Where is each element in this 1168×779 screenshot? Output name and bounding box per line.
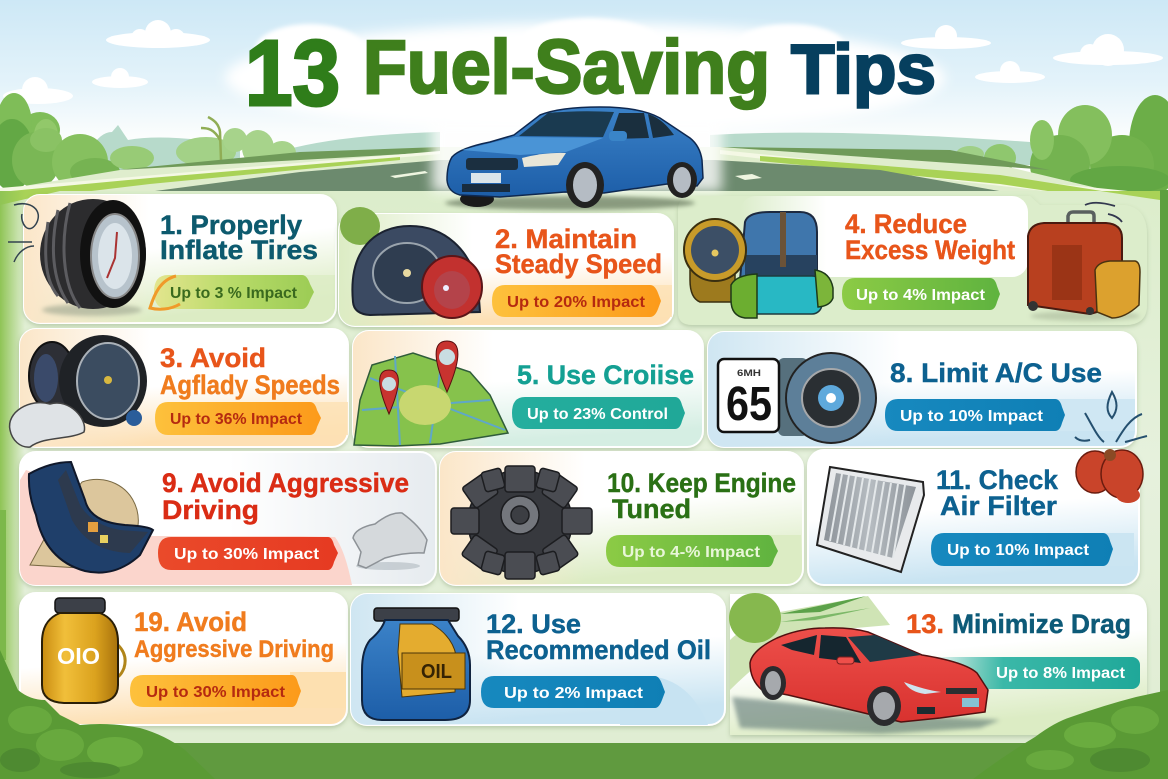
icon: oil jug (362, 608, 470, 720)
heading (486, 609, 711, 665)
impact pill: Up to 8% Impact (996, 665, 1126, 682)
background: sky (0, 0, 1168, 170)
icon: speedometer (352, 226, 482, 318)
heading: 10. Keep Engine (607, 468, 796, 498)
distant hills (90, 125, 1040, 170)
icon: speed sign and A/C: 65 (726, 378, 772, 431)
impact pill (150, 275, 335, 309)
icon: wheels and cloth (10, 335, 147, 447)
heading: Agflady Speeds (160, 370, 340, 400)
impact pill (930, 657, 1140, 689)
heading: 9. Avoid Aggressive (162, 468, 409, 498)
icon: swirl (8, 204, 38, 262)
heading: Tuned (612, 494, 691, 524)
heading (936, 465, 1059, 521)
panel: 13 drag (729, 593, 1147, 735)
impact pill (606, 535, 801, 567)
panel: 5 cruise (353, 331, 703, 447)
heading: 2. Maintain (495, 224, 637, 254)
heading: Driving (162, 495, 259, 525)
icon: red apple (1076, 449, 1143, 503)
icon: air swirls (1075, 392, 1147, 442)
heading: 12. Use (486, 609, 581, 639)
impact pill (842, 278, 1000, 310)
title: Fuel-Saving (363, 25, 770, 110)
icon: white glove (353, 513, 427, 570)
heading: Recommended Oil (486, 635, 711, 665)
right strip (1160, 190, 1168, 779)
impact pill (492, 285, 672, 317)
impact pill: Up to 30% Impact (146, 684, 286, 701)
icon: red car (750, 628, 988, 726)
icon: blue car (445, 107, 703, 210)
clouds (3, 18, 1163, 133)
heading: 19. Avoid (134, 607, 247, 637)
icon: bush (340, 207, 380, 245)
impact pill: Up to 10% Impact (947, 542, 1090, 559)
title (245, 21, 936, 125)
icon: map with pins (354, 341, 508, 446)
heading: 13. (906, 609, 944, 639)
impact pill: Up to 30% Impact (174, 546, 320, 563)
blue car glow (432, 120, 722, 192)
impact pill: Up to 20% Impact (507, 294, 646, 311)
icon: engine (451, 466, 592, 579)
heading (845, 209, 1015, 265)
heading: 1. Properly (160, 210, 302, 240)
lower panel background (0, 191, 1160, 743)
icon: tree and wind (729, 593, 890, 690)
icon: red suitcase (1028, 203, 1140, 321)
panel: 11 air filter (808, 449, 1143, 585)
panel: 8 A/C (708, 332, 1147, 447)
impact pill (158, 537, 338, 570)
icon: tire with gauge (40, 199, 146, 316)
impact pill: Up to 4% Impact (856, 287, 986, 304)
title: 13 (245, 21, 340, 125)
panel: 1 tires (8, 195, 336, 323)
panel: 19 aggressive driving (20, 593, 347, 725)
impact pill: Up to 36% Impact (170, 411, 303, 428)
road (0, 147, 1168, 205)
impact pill: Up to 3 % Impact (170, 285, 298, 302)
impact pill: Up to 2% Impact (504, 685, 644, 702)
panel: 4 reduce weight (678, 196, 1147, 325)
icon: oil jug: OIL (421, 661, 452, 683)
heading: Minimize Drag (952, 609, 1131, 639)
icon: seat and bag (29, 462, 153, 573)
icon: speed sign and A/C: 6MH (737, 368, 761, 379)
icon: bags with clock (684, 212, 833, 318)
heading (160, 210, 318, 265)
heading (134, 607, 334, 663)
panel top edge slope (0, 191, 1160, 743)
heading: 8. Limit A/C Use (890, 358, 1102, 388)
icon: speed sign and A/C (718, 353, 876, 443)
panel: 9 aggressive driving (20, 452, 436, 585)
icon: air filter (817, 467, 924, 572)
heading (495, 224, 662, 279)
icon: oil jar (42, 598, 125, 703)
heading: 11. Check (936, 465, 1059, 495)
heading: Inflate Tires (160, 235, 318, 265)
heading: Aggressive Driving (134, 636, 334, 663)
impact pill (130, 672, 346, 708)
heading: 4. Reduce (845, 209, 967, 239)
panel: 2 steady speed (339, 207, 673, 326)
icon: road shadow (732, 697, 1000, 734)
bush bottom right (973, 690, 1168, 779)
heading: 3. Avoid (160, 343, 266, 373)
bush bottom left (0, 650, 215, 779)
impact pill: Up to 10% Impact (900, 408, 1044, 425)
trees right (956, 95, 1168, 195)
heading (162, 468, 409, 525)
heading (607, 468, 796, 524)
impact pill: Up to 4-% Impact (622, 544, 761, 561)
impact pill (931, 533, 1134, 566)
heading: Steady Speed (495, 249, 662, 279)
heading: 5. Use Croiise (517, 360, 694, 390)
panel: 3 avoid speeds (10, 329, 348, 447)
heading: Air Filter (940, 491, 1058, 521)
impact pill (481, 676, 708, 725)
heading: Excess Weight (845, 235, 1015, 265)
trees left (0, 93, 296, 191)
impact pill (885, 399, 1135, 431)
title: Tips (791, 30, 936, 108)
impact pill (512, 397, 685, 429)
bottom strip (0, 743, 1168, 779)
impact pill (155, 402, 348, 435)
panel: 12 oil (351, 594, 725, 725)
panel: 10 engine (440, 452, 803, 585)
impact pill: Up to 23% Control (527, 406, 668, 423)
heading (160, 343, 340, 400)
icon: oil jar: OIO (57, 643, 100, 669)
